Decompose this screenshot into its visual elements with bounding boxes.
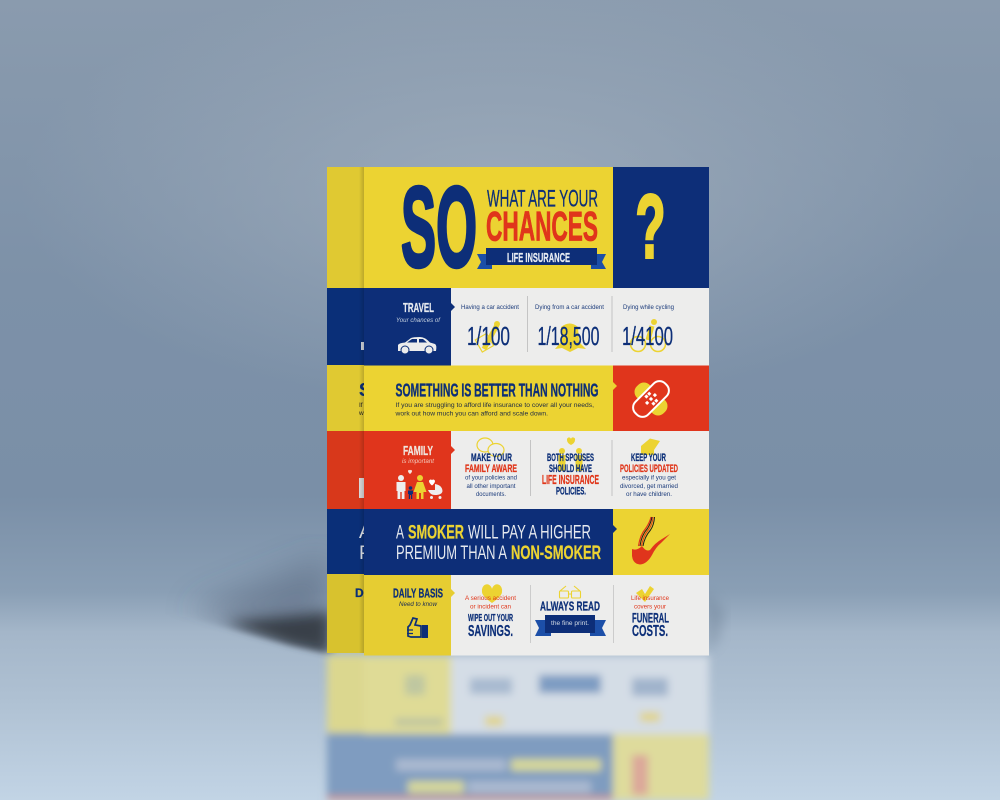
- icon: heart: [482, 584, 502, 603]
- tip: keep policies updated: KEEP YOUR: [631, 452, 666, 464]
- icon: speech bubbles: [477, 438, 504, 456]
- back poster: If: [359, 402, 363, 409]
- icon: yellow ribbon: [475, 321, 500, 352]
- icon: yellow wreck: [555, 324, 586, 352]
- travel heading: TRAVEL: [403, 300, 434, 315]
- panel: something is better: [364, 366, 709, 431]
- smoker line one: [396, 522, 591, 544]
- stat: car accident: Having a car accident: [461, 304, 519, 311]
- tip: family aware: of your policies and: [465, 474, 518, 482]
- smoker line one: A: [396, 522, 404, 544]
- back poster: [327, 167, 364, 653]
- icon: yellow cyclist: [630, 319, 666, 352]
- panel: travel: [364, 288, 675, 366]
- ribbon: the fine print: the fine print.: [551, 620, 589, 627]
- smoker line two: PREMIUM THAN A: [396, 542, 507, 564]
- body text: work out how much you can afford and scale down.: [394, 410, 548, 418]
- icon: check mark: [636, 586, 654, 602]
- tip: family aware: all other important: [466, 483, 516, 490]
- tip: both spouses: LIFE INSURANCE: [542, 473, 599, 487]
- stat: cycling: [622, 304, 675, 352]
- stat: car accident: [461, 304, 519, 352]
- stat: dying from car accident: 1/18,500: [538, 321, 600, 351]
- stat: dying from car accident: [535, 304, 604, 352]
- header panel: SO: [401, 164, 477, 292]
- question mark: ?: [636, 178, 666, 278]
- stat: car accident: 1/100: [467, 321, 510, 351]
- tip: always read: ALWAYS READ: [540, 598, 600, 614]
- tip: both spouses: POLICIES.: [556, 486, 586, 498]
- daily heading: DAILY BASIS: [393, 586, 443, 600]
- family heading: FAMILY: [403, 443, 433, 458]
- panel: family: [364, 431, 679, 509]
- ribbon: life insurance: [477, 248, 606, 269]
- poster base: [364, 167, 709, 656]
- smoker line one: SMOKER: [408, 522, 464, 544]
- tip: keep policies updated: POLICIES UPDATED: [620, 463, 678, 475]
- tip: keep policies updated: especially if you get: [622, 474, 676, 482]
- tip: family aware: [465, 438, 518, 498]
- back poster: S: [359, 380, 371, 400]
- tip: funeral costs: covers your: [634, 604, 667, 610]
- tip: funeral costs: Life insurance: [631, 595, 669, 602]
- icon: glasses: [560, 586, 580, 598]
- travel subheading: Your chances of: [396, 317, 441, 324]
- icon: pipe: [632, 517, 670, 564]
- tip: both spouses: SHOULD HAVE: [549, 463, 592, 475]
- back poster: A: [359, 522, 372, 543]
- icon: thumbs up: [407, 618, 428, 638]
- back poster: P: [359, 543, 372, 564]
- ribbon: life insurance: LIFE INSURANCE: [507, 250, 570, 265]
- tip: accident savings: [465, 584, 516, 640]
- body text: [394, 402, 594, 418]
- tip: accident savings: SAVINGS.: [468, 623, 513, 640]
- back poster: w: [358, 410, 364, 417]
- header panel: [364, 164, 709, 292]
- title: chances: CHANCES: [486, 203, 598, 250]
- icon: family: [396, 470, 442, 499]
- tip: both spouses: BOTH SPOUSES: [547, 452, 594, 464]
- family subheading: is important: [402, 458, 434, 465]
- smoker line two: NON-SMOKER: [511, 542, 601, 564]
- daily subheading: Need to know: [399, 601, 437, 608]
- tip: accident savings: WIPE OUT YOUR: [468, 613, 513, 624]
- reflection of posters: [327, 655, 709, 800]
- tip: funeral costs: FUNERAL: [632, 610, 669, 626]
- tip: always read: [535, 586, 606, 636]
- heading: SOMETHING IS BETTER THAN NOTHING: [396, 380, 598, 400]
- tip: keep policies updated: [620, 438, 679, 498]
- shadow behind posters: [190, 555, 725, 660]
- smoker line one: WILL PAY A HIGHER: [468, 522, 591, 544]
- front poster: [364, 164, 709, 656]
- panel: smoker: [364, 509, 709, 575]
- tip: both spouses: [542, 437, 599, 498]
- tip: funeral costs: COSTS.: [632, 623, 668, 640]
- icon: document: [641, 438, 660, 455]
- tip: keep policies updated: or have children.: [626, 491, 672, 498]
- tip: accident savings: A serious accident: [465, 595, 516, 602]
- icon: car: [398, 337, 436, 354]
- tip: family aware: documents.: [476, 491, 506, 498]
- body text: If you are struggling to afford life insurance to cover all your needs,: [396, 402, 594, 409]
- tip: family aware: MAKE YOUR: [471, 452, 512, 464]
- panel: daily basis: [364, 575, 669, 656]
- icon: couple with heart: [558, 437, 582, 471]
- tip: family aware: FAMILY AWARE: [465, 463, 517, 475]
- stat: cycling: 1/4100: [622, 321, 673, 351]
- back poster: DA: [355, 586, 373, 600]
- stat: dying from car accident: Dying from a car accident: [535, 304, 604, 311]
- title: what are your: WHAT ARE YOUR: [487, 186, 598, 212]
- tip: keep policies updated: divorced, get married: [620, 483, 679, 490]
- icon: bandage: [623, 371, 679, 427]
- tip: accident savings: or incident can: [470, 604, 511, 610]
- tip: funeral costs: [631, 586, 669, 640]
- stat: cycling: Dying while cycling: [623, 304, 675, 311]
